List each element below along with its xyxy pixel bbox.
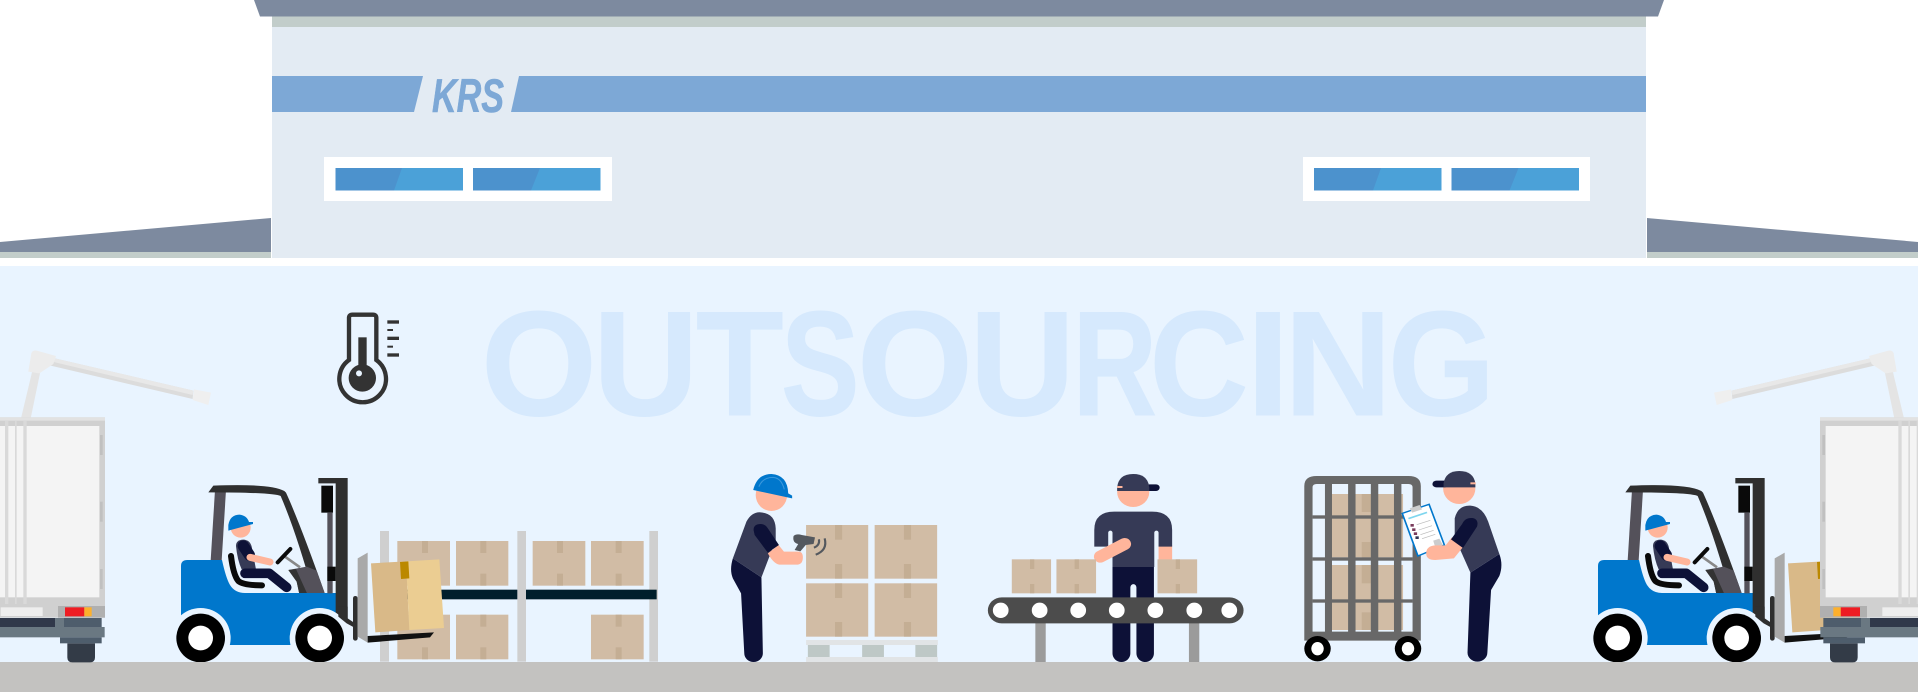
right truck <box>1714 351 1918 662</box>
title: OUTSOURCING watermark: S <box>781 280 860 447</box>
worker body <box>731 474 803 662</box>
caged boxes <box>1331 494 1403 630</box>
shelved boxes <box>397 541 644 659</box>
mast foot <box>338 607 354 627</box>
truck body <box>0 417 105 662</box>
left truck <box>0 351 211 662</box>
title: OUTSOURCING watermark: C <box>1150 280 1248 447</box>
dock arm <box>1714 351 1904 418</box>
pallet <box>806 640 938 662</box>
forklift body <box>181 560 338 645</box>
steering wheel <box>278 549 300 567</box>
barcode scanner <box>793 534 825 555</box>
worker scanning pallet <box>731 474 938 662</box>
title: OUTSOURCING watermark: U <box>593 280 698 447</box>
boxes on belt <box>1012 559 1197 593</box>
cage frame <box>1304 476 1421 641</box>
blue stripe right <box>511 76 1646 112</box>
front wheel <box>295 614 344 662</box>
KRS logo: KRS <box>432 69 504 122</box>
driver <box>1645 515 1704 587</box>
front wheel <box>1712 614 1761 662</box>
worker right forearm <box>1159 545 1172 562</box>
crate on forks <box>1788 559 1861 632</box>
fork carriage <box>1770 553 1851 643</box>
right forklift with driver <box>1588 478 1861 668</box>
blue stripe left <box>272 76 423 112</box>
steering wheel <box>1695 549 1717 567</box>
cab posts and roof <box>208 485 325 594</box>
right side roof <box>1647 218 1918 258</box>
left forklift with driver <box>171 478 444 668</box>
fork carriage <box>353 553 434 643</box>
storage shelf with boxes <box>380 531 658 662</box>
head and cap <box>1437 471 1476 504</box>
dashboard <box>1705 567 1742 594</box>
cab posts and roof <box>1625 485 1742 594</box>
title: OUTSOURCING watermark: O <box>481 280 597 447</box>
worker torso <box>1094 512 1172 567</box>
roof fascia <box>272 16 1646 27</box>
warehouse building <box>0 0 1918 258</box>
main roof <box>254 0 1664 16</box>
left window <box>324 157 612 201</box>
clipboard <box>1402 504 1444 556</box>
roll cage with boxes <box>1304 476 1421 661</box>
title: OUTSOURCING watermark: I <box>1246 280 1290 447</box>
crate on forks <box>371 559 444 632</box>
cage wheels <box>1304 636 1421 661</box>
mast <box>318 478 348 620</box>
left side roof <box>0 218 271 258</box>
driver <box>228 515 287 587</box>
worker legs <box>1112 567 1154 662</box>
title: OUTSOURCING watermark: O <box>857 280 973 447</box>
ground floor <box>0 662 1918 692</box>
worker with clipboard <box>1402 471 1501 662</box>
worker head and cap <box>1117 474 1156 507</box>
forklift body <box>1598 560 1755 645</box>
mast foot <box>1755 607 1771 627</box>
shelf beam <box>389 590 657 599</box>
worker at conveyor <box>988 474 1244 662</box>
truck body <box>1820 417 1918 662</box>
rear wheel <box>1593 614 1642 662</box>
arm <box>1426 518 1478 560</box>
worker left arm <box>1100 544 1125 557</box>
interior background <box>0 266 1918 662</box>
title: OUTSOURCING watermark: N <box>1284 280 1392 447</box>
title: OUTSOURCING watermark: R <box>1072 280 1157 447</box>
right window <box>1303 157 1590 201</box>
shelf uprights <box>380 531 658 662</box>
conveyor belt <box>988 597 1244 662</box>
title: OUTSOURCING watermark: G <box>1388 280 1495 447</box>
title: OUTSOURCING watermark: T <box>696 280 784 447</box>
wheel arches <box>171 608 350 668</box>
mast <box>1735 478 1765 620</box>
building wall <box>272 27 1646 258</box>
title: OUTSOURCING watermark: U <box>970 280 1075 447</box>
rear wheel <box>176 614 225 662</box>
torso <box>1455 506 1499 573</box>
dashboard <box>288 567 325 594</box>
icon: thermometer <box>339 315 399 402</box>
legs <box>1468 554 1501 662</box>
wheel arches <box>1588 608 1767 668</box>
stacked boxes <box>806 525 937 637</box>
dock arm <box>21 351 211 418</box>
